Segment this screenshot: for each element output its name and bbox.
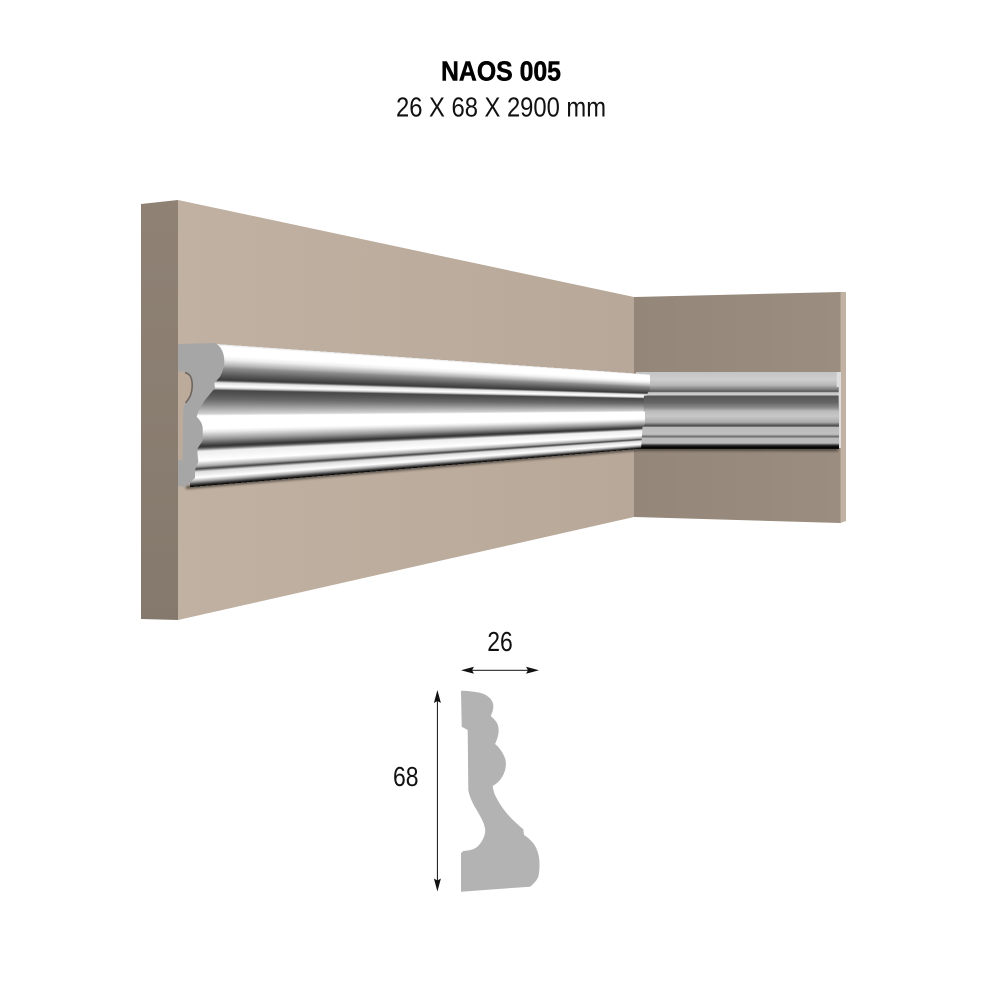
width label: 26 [487,626,513,657]
cross-section profile [461,691,539,892]
moulding cut end profile [178,343,224,487]
return moulding end cap [837,372,841,448]
wall: long front face [178,200,634,620]
return moulding face [636,372,839,449]
wall: return face [634,292,840,523]
wall: right end edge [840,292,846,523]
moulding on long wall [190,344,650,487]
wall: left end side face [141,200,178,620]
width dimension arrow [461,667,539,674]
moulding contact shadow [186,449,838,488]
height label: 68 [393,761,419,792]
height dimension arrow [434,690,441,892]
product dimensions: 26 X 68 X 2900 mm [396,92,606,122]
product title: NAOS 005 [441,56,561,86]
